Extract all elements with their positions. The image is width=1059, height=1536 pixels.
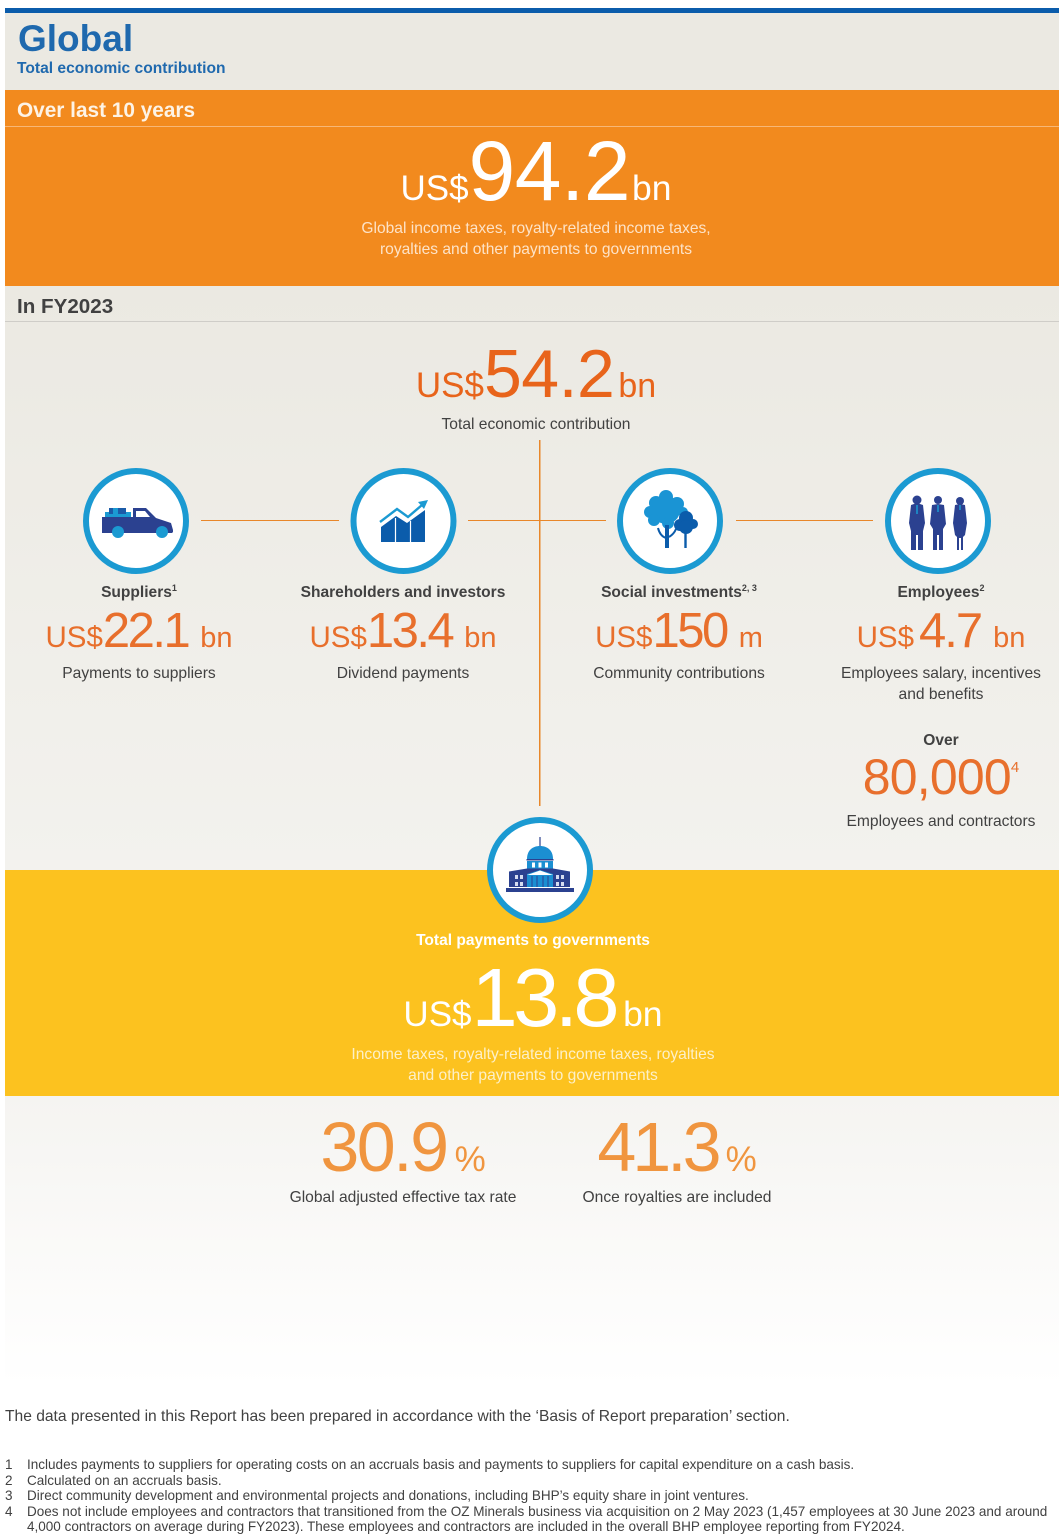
icon: truck [86,471,186,571]
icon: government building [490,820,590,920]
description [841,665,1041,703]
footnotes [5,1457,1047,1534]
figure: % [726,1140,757,1179]
report basis statement: The data presented in this Report has been prepared in accordance with the ‘Basis of Report preparation’ section. [5,1408,790,1425]
description: global payments: royalties and other payments to governments [380,241,692,258]
footnotes: Includes payments to suppliers for operating costs on an accruals basis and payments to suppliers for capital expenditure on a cash basis. [27,1457,854,1472]
header panel [5,13,1059,90]
description: Payments to suppliers [62,665,216,682]
figure: US$13.8bn [403,951,663,1044]
icon: growth chart [354,471,454,571]
figure: 13.4 [367,604,452,658]
icon: trees [620,471,720,571]
connector lines [201,440,873,806]
figure: US$54.2bn: bn [618,367,656,405]
column: suppliers [45,583,233,682]
description: Dividend payments [337,665,469,682]
figure: US$94.2bn [400,124,672,218]
description: Community contributions [593,665,765,682]
subtitle: Total economic contribution [17,60,226,77]
figure: 22.1 [103,604,188,658]
figure: US$ [857,621,914,654]
heading divider [5,126,1059,127]
figure: bn [200,622,233,654]
top blue rule [5,8,1059,13]
footnotes: Calculated on an accruals basis. [27,1472,222,1488]
figure: US$94.2bn: bn [632,168,672,208]
figure: US$13.8bn: bn [623,994,663,1034]
description: and benefits [899,686,983,703]
description: Employees and contractors [847,813,1035,830]
footnotes: 3 [5,1488,13,1503]
figure: US$ [309,621,367,654]
figure: US$ [595,621,652,654]
figure: 150 [652,604,727,658]
panel: total payments background [5,870,1059,1096]
figure: 4.7 [919,604,981,658]
figure: bn [993,622,1025,654]
footnotes: Does not include employees and contractors that transitioned from the OZ Minerals business via acquisition on 2 May 2023 (1,457 employees at 30 June 2023 and around [27,1504,1047,1518]
heading: total payments to governments: Total payments to governments [416,932,650,949]
figure: US$ [45,621,103,654]
description: Once royalties are included [583,1189,771,1206]
heading: Suppliers1 [101,583,177,601]
figure [857,604,1025,658]
figure: US$54.2bn [416,336,656,412]
column: social investments [593,583,765,682]
figure: bn [464,622,497,654]
description: government payments [351,1046,715,1084]
figure: US$94.2bn: US$ [400,169,469,208]
description: government payments: and other payments to governments [408,1067,658,1084]
footnotes: Direct community development and environmental projects and donations, including BHP’s equity share in joint ventures. [27,1488,749,1503]
column: employees [841,583,1041,830]
panel heading: In FY2023 [17,295,113,318]
figure: 30.9 [320,1108,447,1186]
figure [595,604,763,658]
figure: US$54.2bn: 54.2 [484,336,614,412]
figure: % [455,1140,486,1179]
footnotes: 2 [5,1472,13,1488]
heading: Shareholders and investors [301,584,505,601]
footnotes: 4,000 contractors on average during FY2023). These employees and contractors are included in the overall BHP employee reporting from FY2024. [27,1519,905,1534]
heading: Social investments2, 3 [601,583,757,601]
panel heading: Over last 10 years [17,99,195,122]
label: over: Over [923,732,959,749]
figure: US$13.8bn: US$ [403,995,472,1034]
icon: employees [888,471,988,571]
figure: US$13.8bn: 13.8 [472,951,615,1044]
heading divider [5,321,1059,322]
column: shareholders [301,584,505,682]
stat: royalties included [583,1108,771,1206]
panel: over last 10 years [5,90,1059,286]
description: government payments: Income taxes, royalty-related income taxes, royalties [351,1046,715,1063]
label: total economic contribution: Total economic contribution [442,416,630,433]
figure: 41.3 [597,1108,718,1186]
description: Employees salary, incentives [841,665,1041,682]
figure: US$94.2bn: 94.2 [469,124,630,218]
description: global payments: Global income taxes, royalty-related income taxes, [361,220,711,237]
heading: Employees2 [897,583,985,601]
figure: US$54.2bn: US$ [416,366,484,405]
title: Global [18,18,133,59]
description: Global adjusted effective tax rate [290,1189,516,1206]
figure: m [739,622,763,654]
footnotes: 1 [5,1457,13,1472]
lower gradient background [5,1096,1059,1386]
stat: effective tax rate [290,1108,516,1206]
figure [309,604,497,658]
panel: in FY2023 [5,286,1059,870]
figure: 80,000: 80,0004 [863,749,1019,805]
description: global payments [361,220,711,258]
figure [45,604,233,658]
footnotes: 4 [5,1504,13,1518]
